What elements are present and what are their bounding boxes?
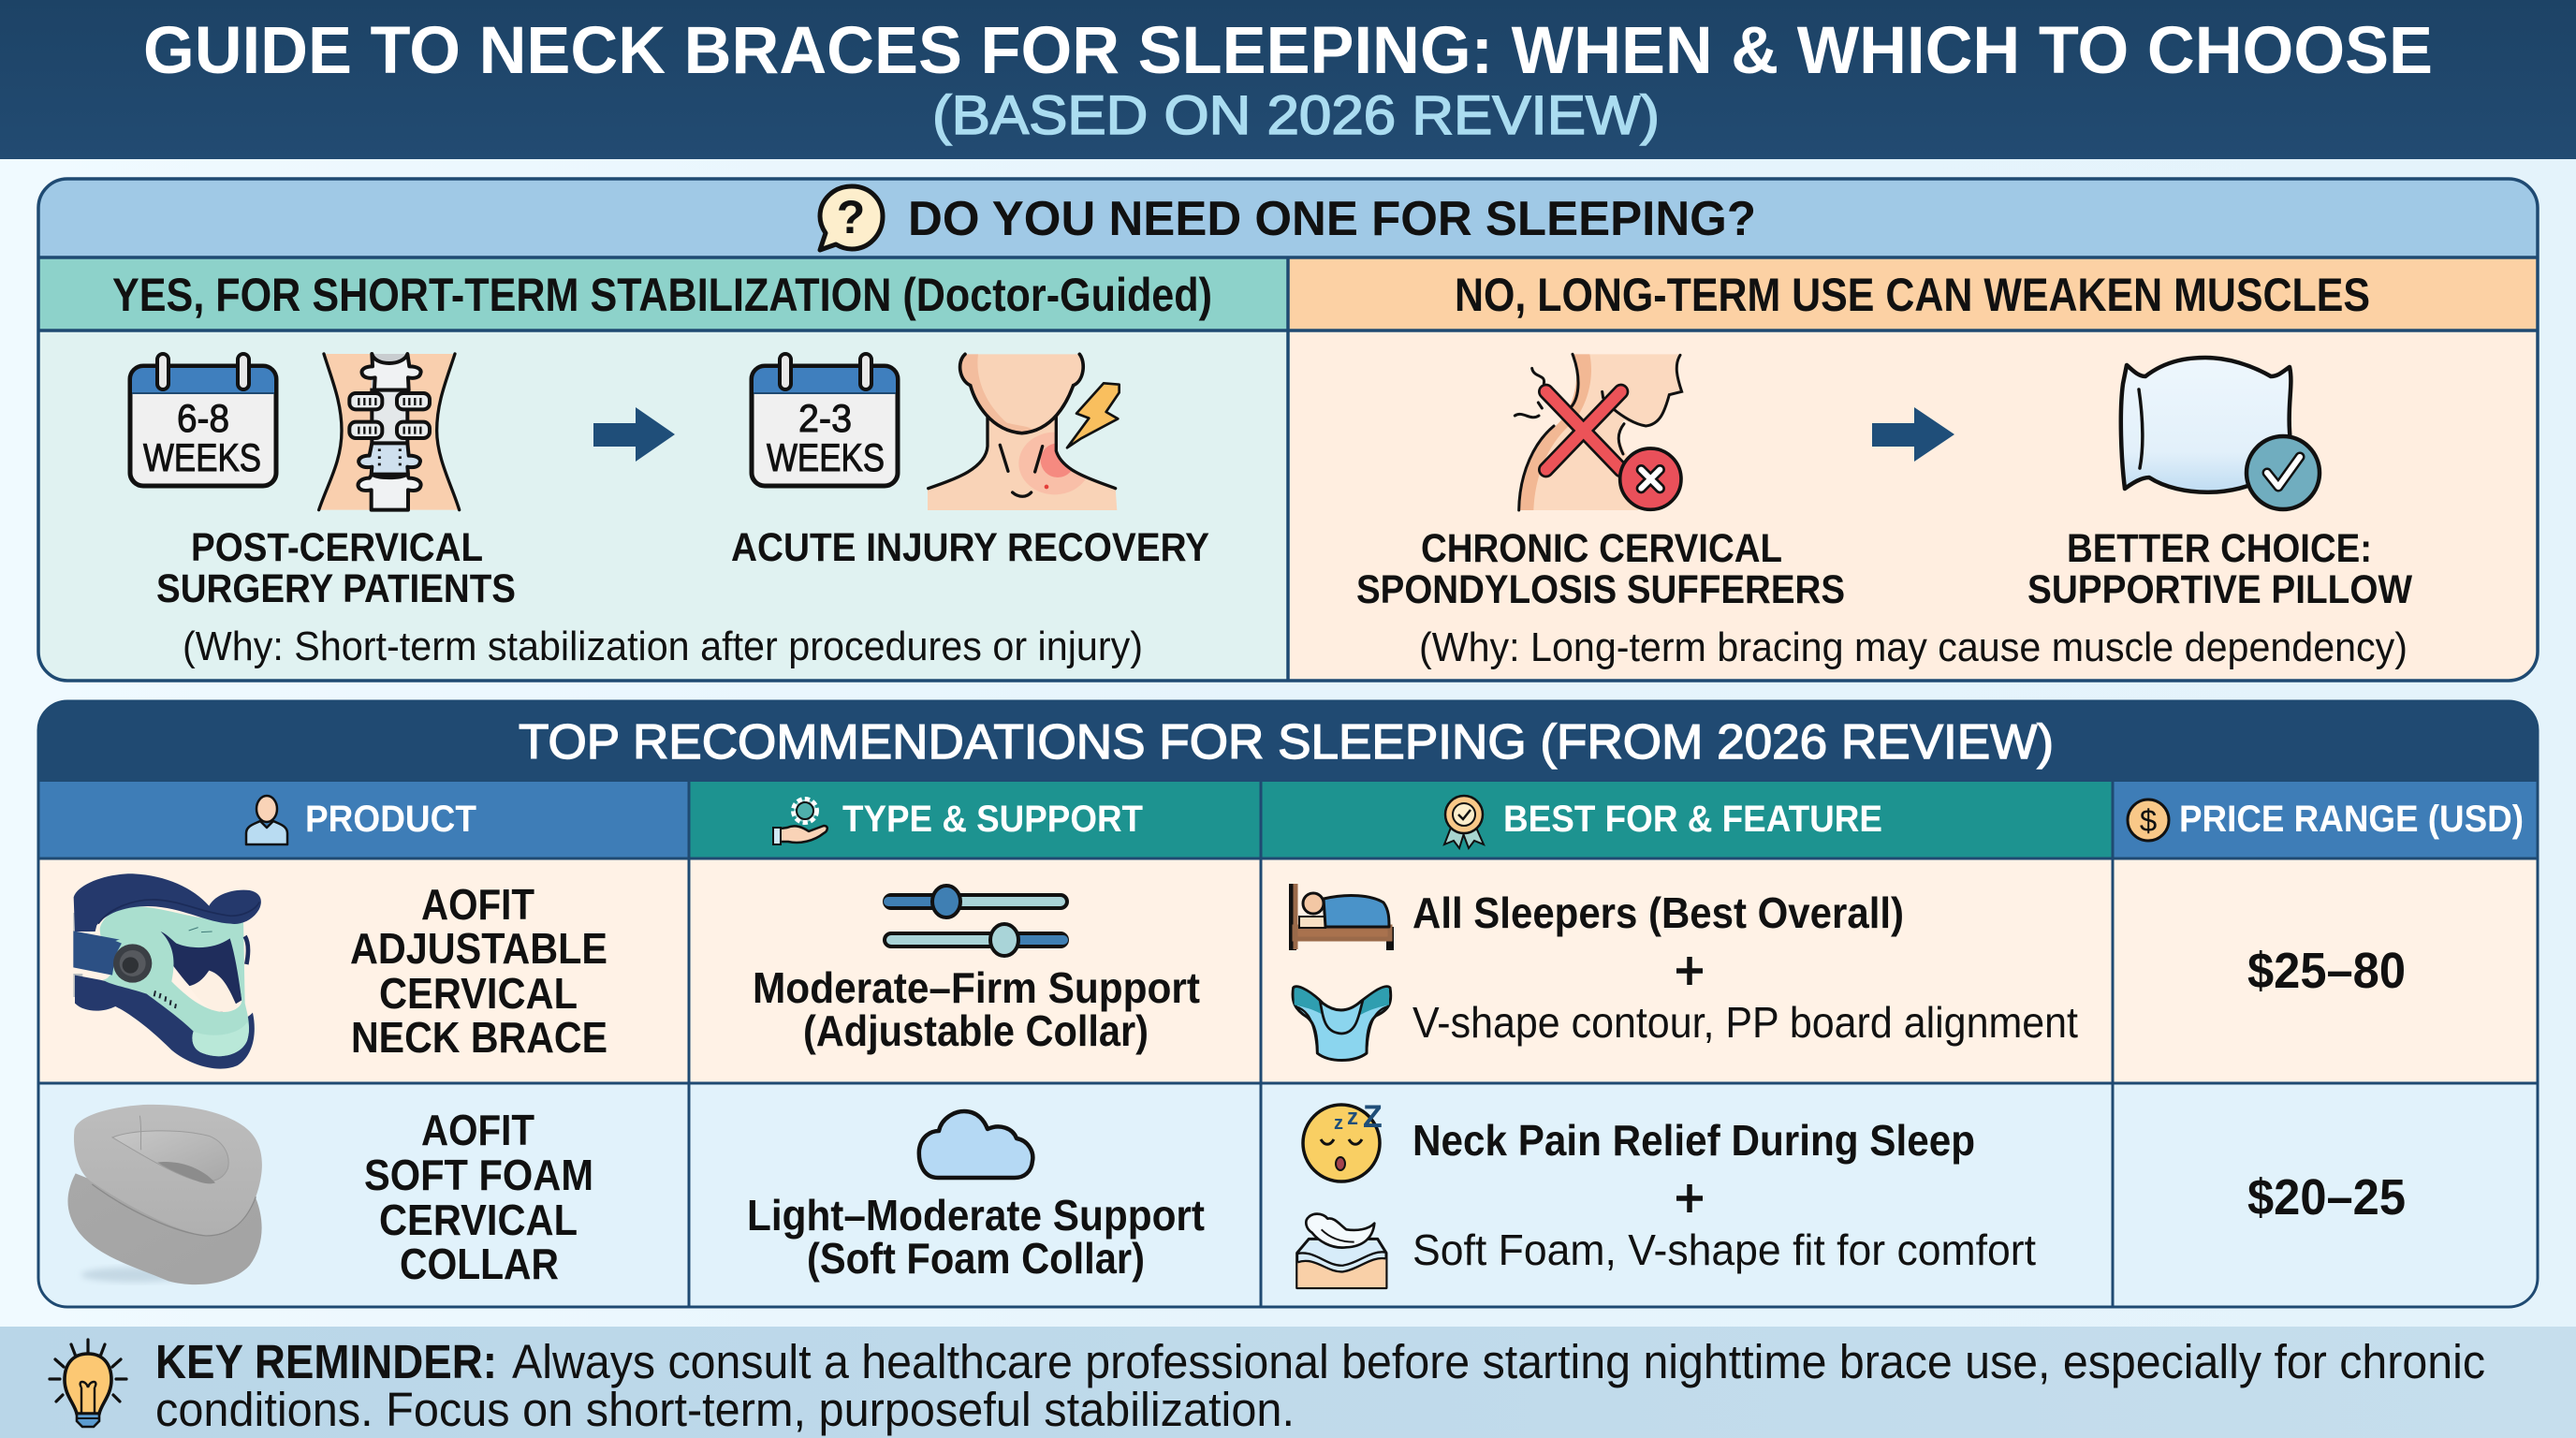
arrow: right group [1872,407,1954,462]
reminder text: KEY REMINDER: [155,1335,497,1388]
panel: do you need one for sleeping [37,178,2539,682]
reminder text [155,1335,2485,1436]
label: post-cervical surgery patients: SURGERY PATIENTS [156,566,516,611]
label: acute injury recovery: ACUTE INJURY RECOVERY [731,525,1209,570]
icon: award ribbon [1444,796,1484,848]
icon: calendar 2-3 weeks: 2-3 [798,396,852,440]
label: better choice supportive pillow: BETTER CHOICE: [2067,526,2372,571]
row: soft foam collar [67,1099,2406,1288]
icon: sleeping face [1303,1099,1383,1181]
label: chronic cervical spondylosis sufferers: SPONDYLOSIS SUFFERERS [1356,567,1845,612]
column header: price range: PRICE RANGE (USD) [2179,799,2524,840]
product name: soft foam collar [364,1106,593,1288]
icon: person [246,796,287,844]
support text: light-moderate [747,1191,1205,1283]
label: chronic cervical spondylosis sufferers [1356,526,1845,612]
product name: soft foam collar: SOFT FOAM [364,1151,593,1199]
brace: top flap [74,873,261,932]
feature: soft foam: Soft Foam, V-shape fit for comfort [1412,1225,2036,1274]
column header: type and support [773,799,1143,844]
icon: cloud [919,1111,1032,1178]
product name: soft foam collar: CERVICAL [379,1196,578,1244]
product name: adjustable brace: CERVICAL [379,969,578,1018]
column header: type and support: TYPE & SUPPORT [842,799,1143,840]
arrow: left group [593,407,675,462]
icon: dollar coin: $ [2140,803,2157,838]
brace: strap [73,931,124,976]
icon: feather on foam [1297,1214,1386,1288]
reminder text: Always consult a healthcare professional before starting nighttime brace use, especially for chronic [512,1335,2485,1388]
product name: soft foam collar: COLLAR [400,1240,559,1288]
best for: neck pain relief: Neck Pain Relief During Sleep [1412,1116,1975,1165]
brace: mint arm [115,938,167,974]
product name: adjustable brace: NECK BRACE [351,1013,607,1062]
icon: neck with red x [1515,354,1682,510]
icon: spine with screws [319,354,460,510]
icon: calendar 6-8 weeks [130,354,276,486]
icon: sleeping face: z [1347,1105,1358,1130]
icon: question bubble [820,186,883,250]
heading: do you need one: DO YOU NEED ONE FOR SLEEPING? [908,192,1756,246]
table title: TOP RECOMMENDATIONS FOR SLEEPING (FROM 2026 REVIEW) [519,715,2054,770]
row: adjustable brace [73,873,2406,1069]
icon: calendar 6-8 weeks: 6-8 [177,396,229,440]
brace: inner navy lining [156,932,242,1013]
reminder text: conditions. Focus on short-term, purposeful stabilization. [155,1383,1295,1436]
support text: moderate-firm: (Adjustable Collar) [803,1006,1149,1055]
icon: calendar 6-8 weeks: WEEKS [143,435,261,479]
subtitle: (BASED ON 2026 REVIEW) [932,85,1660,146]
product name: adjustable brace [350,880,607,1062]
yes heading: YES, FOR SHORT-TERM STABILIZATION (Doctor-Guided) [112,269,1212,321]
column header: best for and feature: BEST FOR & FEATURE [1503,799,1882,840]
label: post-cervical surgery patients: POST-CERVICAL [191,525,483,570]
price: 20-25: $20–25 [2247,1169,2406,1225]
no heading: NO, LONG-TERM USE CAN WEAKEN MUSCLES [1455,269,2370,321]
brace: chin pad [192,1022,249,1056]
icon: sleeping face: z [1334,1113,1343,1134]
icon: neck pain [928,354,1120,510]
label: better choice supportive pillow [2027,526,2412,612]
brace: opening [189,971,237,1012]
support text: moderate-firm: Moderate–Firm Support [753,963,1200,1012]
icon: sleeping face: Z [1363,1099,1383,1135]
price: 25-80: $25–80 [2247,943,2406,999]
plus sign [1676,957,1703,985]
why note: left: (Why: Short-term stabilization after procedures or injury) [183,624,1143,669]
column header: best for and feature [1444,796,1882,848]
icon: sliders [884,886,1068,956]
brace: mint frame [100,906,249,1056]
icon: lightbulb [50,1340,126,1427]
product name: adjustable brace: AOFIT [421,880,534,929]
column header: product: PRODUCT [305,799,476,840]
icon: v-shape contour [1293,987,1391,1060]
header banner [0,0,2576,159]
icon: dollar coin [2128,800,2169,841]
icon: pillow with check [2121,358,2320,509]
brace: lower navy shell [75,976,255,1069]
title: GUIDE TO NECK BRACES FOR SLEEPING: WHEN & WHICH TO CHOOSE [143,14,2433,88]
icon: question bubble: ? [837,191,865,243]
icon: bed [1293,884,1390,950]
product image: adjustable neck brace [73,873,261,1069]
label: post-cervical surgery patients [156,525,516,611]
best for: all sleepers: All Sleepers (Best Overall) [1412,888,1904,937]
label: better choice supportive pillow: SUPPORTIVE PILLOW [2027,567,2412,612]
panel: top recommendations table [37,700,2539,1308]
plus sign [1676,1184,1703,1212]
column header: product [246,796,476,844]
icon: calendar 2-3 weeks [752,354,898,486]
label: chronic cervical spondylosis sufferers: CHRONIC CERVICAL [1421,526,1782,571]
support text: light-moderate: Light–Moderate Support [747,1191,1205,1240]
icon: calendar 2-3 weeks: WEEKS [767,435,885,479]
brace: dial [113,944,152,983]
footer: key reminder [0,1327,2576,1438]
icon: gear over hand [773,800,827,844]
product name: soft foam collar: AOFIT [421,1106,534,1154]
support text: moderate-firm [753,963,1200,1055]
why note: right: (Why: Long-term bracing may cause muscle dependency) [1419,624,2408,670]
feature: v-shape contour: V-shape contour, PP board alignment [1412,998,2078,1047]
product name: adjustable brace: ADJUSTABLE [350,924,607,973]
support text: light-moderate: (Soft Foam Collar) [807,1234,1145,1283]
product image: soft foam collar [67,1105,262,1284]
